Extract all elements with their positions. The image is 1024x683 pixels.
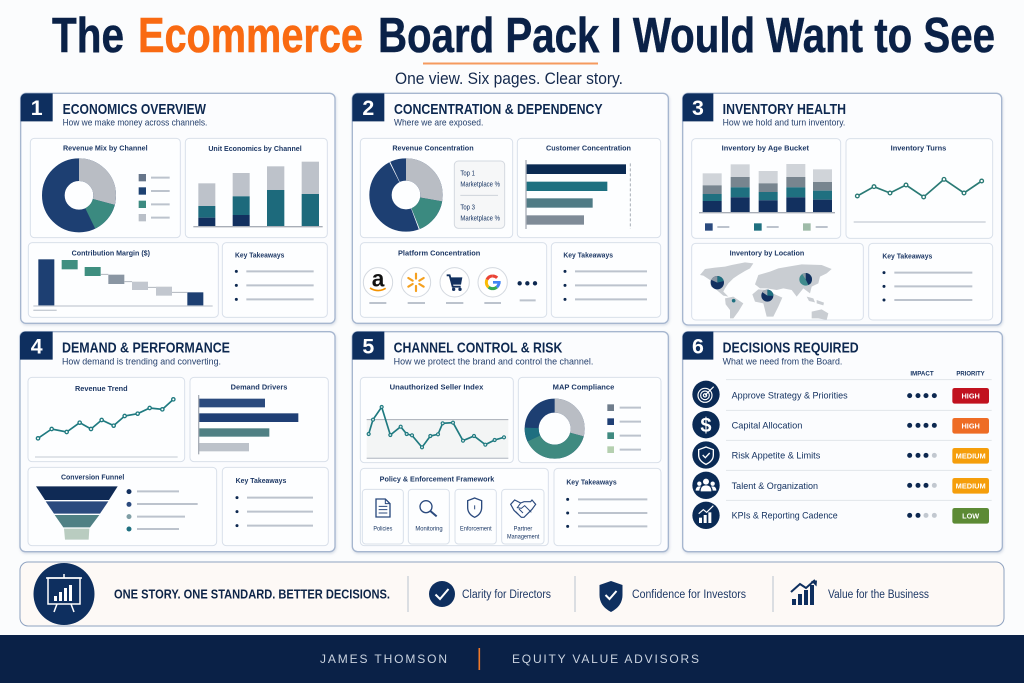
number badge 1 (21, 93, 53, 121)
card: unit economics by channel: Unit Economics by Channel (208, 144, 302, 153)
number badge 5 (352, 332, 384, 360)
title underline (423, 62, 598, 64)
location pie: asia (799, 273, 812, 286)
number badge 2 (352, 93, 384, 121)
subheading: How we protect the brand and control the channel. (394, 356, 593, 366)
card: inventory turns (846, 139, 993, 238)
panel: inventory health (683, 93, 1002, 325)
card: revenue concentration (360, 138, 513, 238)
panel: concentration and dependency (352, 93, 668, 323)
card: revenue trend: Revenue Trend (75, 384, 128, 393)
column headers (910, 371, 985, 377)
footer: EQUITY VALUE ADVISORS (512, 652, 699, 666)
card: inventory turns: Inventory Turns (891, 143, 946, 152)
card: inventory by location: Inventory by Location (730, 249, 805, 258)
title (52, 9, 995, 63)
row: KPIs and reporting cadence: LOW (962, 511, 979, 520)
row: KPIs and reporting cadence (692, 502, 989, 529)
tile: enforcement (455, 489, 496, 544)
heading: INVENTORY HEALTH (723, 101, 846, 118)
heading: CONCENTRATION & DEPENDENCY (394, 101, 603, 118)
tile: policies: Policies (373, 525, 392, 532)
row: capital allocation: HIGH (961, 421, 980, 430)
benefit: clarity for directors: Clarity for Directors (462, 589, 551, 601)
row: approve strategy and priorities: HIGH (961, 391, 980, 400)
heading: DECISIONS REQUIRED (723, 340, 859, 357)
icon: google (478, 268, 507, 297)
card: policy and enforcement framework (360, 468, 548, 546)
number badge 5: 5 (362, 334, 374, 358)
card: key takeaways (869, 243, 993, 320)
panel: demand and performance (20, 332, 335, 552)
row: talent and organization: Talent & Organization (732, 481, 818, 491)
tile: enforcement: Enforcement (460, 525, 492, 532)
subheading: How we hold and turn inventory. (723, 118, 845, 128)
tile: monitoring (408, 489, 449, 544)
card: revenue concentration: Top 1 (460, 170, 475, 177)
number badge 3: 3 (692, 96, 704, 120)
location pie: africa (761, 290, 773, 302)
card: key takeaways (551, 243, 661, 317)
subheading: How demand is trending and converting. (62, 357, 221, 367)
icon: amazon: a (372, 266, 385, 292)
number badge 4: 4 (31, 334, 43, 358)
card: inventory by age bucket: Inventory by Age Bucket (722, 143, 809, 152)
row: approve strategy and priorities: Approve Strategy & Priorities (732, 390, 848, 400)
row: capital allocation: $ (700, 415, 712, 437)
card: contribution margin waterfall: Contribution Margin ($) (72, 248, 150, 257)
card: MAP compliance (518, 377, 661, 463)
card: unauthorized seller index: Unauthorized Seller Index (390, 383, 484, 392)
subheading: What we need from the Board. (723, 356, 842, 366)
number badge 2: 2 (362, 96, 374, 120)
card: revenue concentration: Top 3 (460, 205, 475, 212)
row: KPIs and reporting cadence: KPIs & Reporting Cadence (732, 511, 838, 521)
card: conversion funnel: Conversion Funnel (61, 472, 124, 481)
location pie: north america (711, 276, 724, 289)
banner: one story (20, 562, 1004, 626)
number badge 1: 1 (31, 96, 43, 120)
benefit: value for the business (791, 580, 929, 605)
card: key takeaways: Key Takeaways (566, 478, 617, 487)
card: conversion funnel (28, 467, 217, 546)
row: capital allocation (692, 411, 989, 438)
card: demand drivers (190, 377, 328, 462)
heading: DEMAND & PERFORMANCE (62, 340, 230, 357)
icon: presentation board (34, 563, 94, 625)
column headers: IMPACT (910, 371, 934, 377)
card: platform concentration: Platform Concentration (398, 248, 481, 257)
banner headline: ONE STORY. ONE STANDARD. BETTER DECISIONS. (114, 586, 390, 602)
subheading: Where we are exposed. (394, 118, 483, 128)
card: customer concentration (517, 138, 661, 238)
number badge 3 (683, 93, 713, 121)
row: talent and organization (692, 472, 989, 499)
card: revenue mix by channel (30, 138, 180, 238)
card: key takeaways: Key Takeaways (882, 251, 932, 260)
footer: JAMES THOMSON (320, 652, 447, 666)
number badge 6: 6 (692, 334, 704, 358)
card: revenue concentration: Marketplace % (460, 216, 500, 223)
tile: partner management (502, 489, 544, 544)
row: risk appetite and limits (692, 441, 989, 469)
footer (0, 635, 1024, 683)
benefit: value for the business: Value for the Business (828, 589, 929, 601)
benefit: confidence for investors (600, 581, 746, 612)
number badge 6 (683, 332, 713, 360)
location pie: south america (732, 299, 735, 302)
row: risk appetite and limits: MEDIUM (956, 451, 986, 460)
card: key takeaways (222, 243, 327, 317)
icon: amazon (363, 266, 393, 297)
subheading: How we make money across channels. (63, 118, 207, 128)
card: demand drivers: Demand Drivers (231, 383, 287, 392)
card: platform concentration (360, 243, 547, 317)
title: Ecommerce (138, 9, 363, 63)
row: talent and organization: MEDIUM (956, 481, 986, 490)
card: revenue mix by channel: Revenue Mix by Channel (63, 143, 148, 152)
card: key takeaways: Key Takeaways (236, 476, 286, 485)
card: revenue concentration: Revenue Concentration (392, 144, 474, 153)
card: inventory by location (692, 243, 863, 320)
card: unauthorized seller index (360, 377, 513, 463)
tile: monitoring: Monitoring (415, 525, 443, 532)
card: unit economics by channel (185, 138, 327, 238)
heading: ECONOMICS OVERVIEW (63, 101, 207, 118)
number badge 4 (20, 332, 53, 360)
icon: shopping cart (440, 268, 469, 297)
card: key takeaways (554, 468, 661, 546)
column headers: PRIORITY (956, 371, 985, 377)
icon: more platforms (517, 281, 537, 285)
card: customer concentration: Customer Concentration (546, 144, 631, 153)
card: inventory by age bucket (692, 139, 841, 238)
benefit: clarity for directors (429, 581, 551, 607)
tile: policies (362, 489, 403, 544)
card: policy and enforcement framework: Policy & Enforcement Framework (380, 475, 495, 484)
heading: CHANNEL CONTROL & RISK (394, 340, 562, 357)
row: approve strategy and priorities (692, 381, 989, 408)
world map (700, 262, 832, 320)
subtitle: One view. Six pages. Clear story. (395, 69, 623, 88)
row: risk appetite and limits: Risk Appetite & Limits (732, 451, 821, 461)
tile: partner management: Management (507, 534, 540, 541)
panel: decisions required (683, 332, 1002, 552)
benefit: confidence for investors: Confidence for Investors (632, 589, 746, 601)
tile: partner management: Partner (514, 525, 532, 532)
panel: channel control and risk (352, 332, 668, 552)
card: key takeaways: Key Takeaways (235, 250, 284, 259)
card: revenue trend (28, 377, 185, 462)
card: key takeaways: Key Takeaways (563, 250, 613, 259)
row: capital allocation: Capital Allocation (732, 420, 802, 430)
panel: economics overview (21, 93, 335, 323)
icon: walmart (401, 268, 431, 297)
card: MAP compliance: MAP Compliance (553, 383, 614, 392)
card: key takeaways (222, 467, 328, 546)
card: revenue concentration: Marketplace % (460, 181, 500, 188)
title: The (52, 9, 124, 63)
card: contribution margin waterfall (28, 243, 218, 317)
